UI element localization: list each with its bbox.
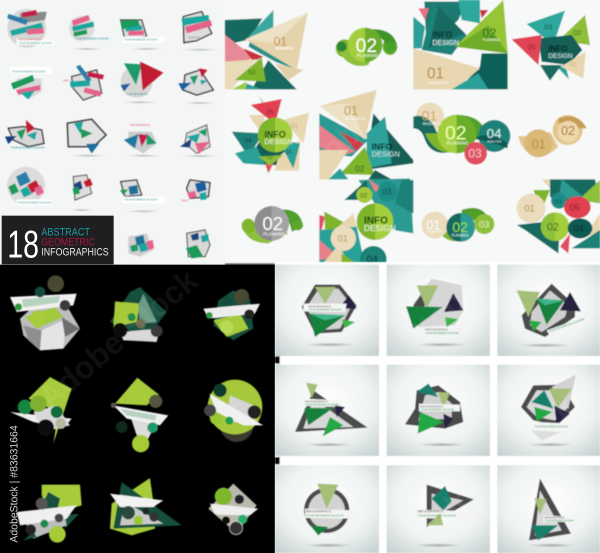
- panel: paper shape infographics: [225, 0, 600, 273]
- label slogan: YOUR BUSINESS SLOGAN: [305, 403, 339, 407]
- number 03: 03: [382, 187, 392, 196]
- label 02 green: 02: [482, 26, 496, 40]
- watermark: stock id: AdobeStock | #83631664: [8, 425, 20, 543]
- label analysis: ANALYSIS: [487, 140, 501, 144]
- number 02: 02: [267, 155, 273, 161]
- card 2: [387, 265, 490, 356]
- number 03: 03: [468, 146, 482, 160]
- item: square badge three: [120, 180, 164, 212]
- label planning: PLANNING: [357, 53, 380, 58]
- number 02: 02: [355, 163, 365, 173]
- label info: INFO: [432, 30, 453, 40]
- label infographics: INFOGRAPHICS: [420, 404, 443, 408]
- watermark: adobe stock: Adobe Stock: [31, 262, 204, 415]
- number 03: 03: [554, 199, 562, 206]
- card 4: [275, 365, 379, 456]
- label slogan: YOUR BUSINESS SLOGAN: [308, 308, 342, 312]
- label slogan: YOUR BUSINESS SLOGAN: [425, 331, 459, 335]
- label design: DESIGN: [364, 223, 396, 233]
- item: triangle badge blue red: [124, 123, 160, 157]
- item: circles info design triangles: [319, 178, 413, 273]
- label info: INFO: [548, 45, 567, 54]
- number 01: 01: [422, 108, 437, 124]
- label infographics: INFOGRAPHICS: [308, 304, 331, 308]
- item: triangle badge red: YOUR BUSINESS: [126, 92, 148, 96]
- item: crumpled badge 1: [10, 275, 80, 350]
- item: bottom badge left: [128, 233, 154, 257]
- label infographics: INFOGRAPHICS: [305, 399, 328, 403]
- label infographics: INFOGRAPHICS: [425, 328, 448, 332]
- item: triangle badge navy: YOUR BUSINESS SLOGAN: [11, 145, 44, 149]
- item: triangle badge blue red: INFOGRAPHICS: [130, 123, 150, 127]
- item: info design triangles 02 01: [413, 0, 508, 89]
- panel: colourful ribbon infographics: [0, 0, 225, 266]
- number 01: 01: [344, 104, 358, 118]
- label planning small: PLANNING: [483, 38, 500, 42]
- item: round square badge: [7, 167, 52, 205]
- item: round square badge: YOUR BUSINESS SLOGAN: [17, 200, 51, 204]
- label 01 tan: 01: [427, 65, 444, 82]
- number 01: 01: [524, 204, 535, 214]
- number 02: 02: [262, 213, 283, 234]
- card 5: [387, 365, 490, 456]
- label design: DESIGN: [372, 150, 400, 159]
- number 02: 02: [547, 222, 559, 234]
- label info: INFO: [264, 129, 286, 139]
- item: info design large triangles: [319, 90, 413, 179]
- item: square badge three: YOUR BUSINESS SLOGAN: [124, 198, 158, 202]
- item: crumpled badge 3: [203, 289, 260, 340]
- number 04: 04: [487, 126, 502, 141]
- card 6: [497, 365, 600, 456]
- item: triangle badge navy: [5, 120, 44, 149]
- item: 02 planning circle band: [336, 28, 397, 66]
- item: square badge four: INFO: [182, 199, 188, 203]
- title block: [2, 216, 114, 266]
- label slogan: YOUR BUSINESS SLOGAN: [534, 424, 568, 428]
- label planning: PLANNING: [446, 141, 469, 146]
- title word: geometric: GEOMETRIC: [41, 236, 95, 248]
- card 3: [497, 265, 600, 356]
- label design: DESIGN: [432, 40, 459, 47]
- label info: INFO: [372, 141, 393, 151]
- card 1: [275, 265, 379, 356]
- label research small: RESEARCH: [428, 81, 449, 85]
- number 04: 04: [367, 255, 378, 266]
- item: crumpled badge 4: [10, 377, 72, 444]
- item: ribbon badge two: [69, 15, 109, 50]
- card 7: [275, 465, 379, 553]
- item: triangles 01 research: [225, 10, 308, 89]
- item: ribbon badge four: [182, 12, 217, 51]
- item: ribbon badge six: [63, 65, 104, 100]
- label research: RESEARCH: [275, 47, 294, 51]
- watermark: adobe stock: Adobe Stock: [281, 42, 454, 195]
- item: crumpled badge 8: [110, 478, 182, 535]
- item: crumpled badge 2: [110, 287, 167, 342]
- title number: 18: [7, 222, 39, 266]
- item: ribbon badge three: [121, 20, 164, 50]
- title word: infographics: INFOGRAPHICS: [41, 246, 109, 258]
- label research: RESEARCH: [423, 122, 442, 126]
- label infographics: INFOGRAPHICS: [544, 516, 565, 520]
- number 01: 01: [338, 234, 348, 244]
- item: triangle badge frame: [67, 119, 106, 157]
- item: bottom badge right: [186, 230, 210, 258]
- label 02: 02: [248, 69, 256, 76]
- item: ribbon badge five: [10, 67, 52, 99]
- number 02: 02: [452, 219, 468, 235]
- number 05: 05: [266, 109, 274, 116]
- item: crumpled badge 6: [204, 380, 263, 442]
- item: ribbon badge five: YOUR BUSINESS SLOGAN: [12, 70, 45, 74]
- number 03: 03: [286, 150, 292, 156]
- panel: black background infographics: [0, 265, 275, 553]
- item: triangle badge outline: [178, 68, 215, 104]
- label slogan: YOUR BUSINESS SLOGAN: [548, 317, 585, 334]
- item: square badge four: [182, 180, 210, 203]
- label planning: PLANNING: [452, 233, 469, 237]
- number 02: 02: [356, 36, 377, 57]
- label infographics: INFOGRAPHICS: [306, 510, 332, 514]
- item: triangle badge pink: [180, 125, 218, 157]
- item: round ribbon badge: [7, 9, 55, 48]
- item: crumpled badge 7: [17, 485, 82, 543]
- watermark: adobe stock: Adobe Stock: [311, 272, 484, 425]
- label research: RESEARCH: [427, 229, 444, 233]
- item: ribbon badge four: SLOGAN: [188, 35, 199, 39]
- label slogan: YOUR BUSINESS SLOGAN: [306, 514, 343, 518]
- label planning: PLANNING: [263, 232, 286, 237]
- item: ribbon badge six: INFO: [63, 79, 70, 83]
- label design: DESIGN: [548, 53, 573, 60]
- label slogan: YOUR BUSINESS SLOGAN: [420, 408, 454, 412]
- item: triangle badge red: [121, 62, 163, 103]
- item: ribbon badge three: YOUR BUSINESS SLOGAN: [124, 38, 158, 42]
- number 03: 03: [544, 22, 552, 31]
- item: crumpled badge 9: [208, 484, 258, 535]
- number 02: 02: [445, 123, 466, 144]
- label design: DESIGN: [264, 137, 292, 146]
- number 04: 04: [244, 137, 252, 144]
- card 8: [387, 465, 490, 553]
- item: round ribbon badge: YOUR BUSINESS SLOGAN: [18, 41, 52, 45]
- number 03: 03: [479, 219, 489, 229]
- item: square badge two: [70, 175, 93, 211]
- number 02: 02: [561, 124, 575, 138]
- number 01: 01: [291, 123, 299, 130]
- label infographics: INFOGRAPHICS: [418, 510, 444, 514]
- card 9: [497, 465, 600, 553]
- label slogan: YOUR BUSINESS SLOGAN: [418, 514, 455, 518]
- number 02: 02: [360, 192, 368, 199]
- item: crumpled badge 5: [111, 378, 168, 452]
- number 01: 01: [570, 63, 578, 69]
- item: circles 01 02 03 row: [422, 208, 494, 242]
- number 05: 05: [569, 203, 580, 213]
- item: ribbon badge two: YOUR BUSINESS SLOGAN: [75, 36, 109, 40]
- item: info design small triangles: [512, 11, 590, 81]
- number 01: 01: [532, 137, 546, 151]
- number 05: 05: [527, 42, 535, 51]
- number 04: 04: [573, 224, 584, 234]
- label info: INFO: [364, 215, 388, 226]
- title word: abstract: ABSTRACT: [41, 226, 90, 238]
- item: circles 01 to 05 triangles: [517, 179, 600, 253]
- item: info design circle star: [232, 96, 309, 173]
- label slogan: YOUR BUSINESS SLOGAN: [544, 519, 574, 522]
- number 01: 01: [426, 218, 440, 232]
- panel: light card infographics: [275, 262, 600, 553]
- item: round ribbon badge: INFOGRAPHICS: [18, 38, 41, 42]
- item: grey 02 planning band: [242, 206, 303, 243]
- label research: RESEARCH: [345, 117, 366, 121]
- label 01: 01: [274, 34, 287, 48]
- watermark: adobe stock: Adobe Stock: [411, 392, 584, 545]
- item: tan circles 01 02: [518, 115, 587, 157]
- item: circles 01 02 03 04: [413, 103, 510, 165]
- number 02: 02: [573, 28, 581, 37]
